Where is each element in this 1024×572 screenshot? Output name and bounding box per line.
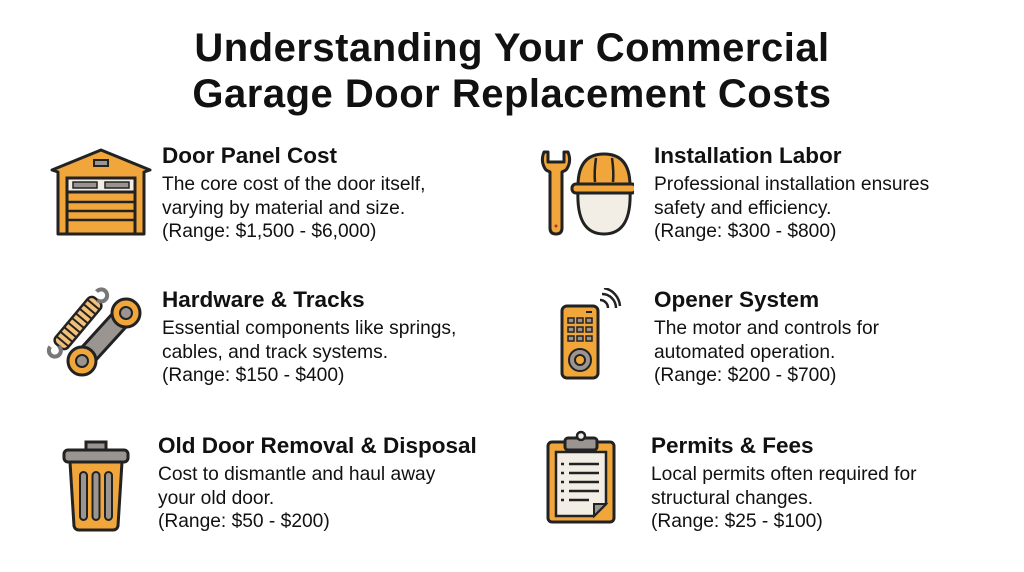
icon: wrench and worker bbox=[540, 150, 634, 236]
text: old door removal: Old Door Removal & Disposal bbox=[158, 433, 477, 458]
icon: spring and pulley bbox=[46, 287, 142, 376]
text: door panel cost: Door Panel Cost bbox=[162, 143, 337, 168]
text: installation labor bbox=[654, 143, 929, 242]
text: opener system: Opener System bbox=[654, 287, 819, 312]
text: door panel cost: The core cost of the door itself, bbox=[162, 174, 425, 195]
title: Garage Door Replacement Costs bbox=[192, 72, 832, 116]
title bbox=[192, 26, 832, 116]
text: hardware & tracks bbox=[162, 287, 456, 386]
text: installation labor: (Range: $300 - $800) bbox=[654, 221, 836, 242]
text: permits & fees: Permits & Fees bbox=[651, 433, 814, 458]
text: permits & fees: (Range: $25 - $100) bbox=[651, 511, 823, 532]
text: opener system: The motor and controls for bbox=[654, 318, 879, 339]
text: door panel cost: varying by material and size. bbox=[162, 198, 405, 218]
text: permits & fees: Local permits often required for bbox=[651, 464, 917, 485]
text: old door removal bbox=[158, 433, 477, 532]
icon: trash can bbox=[62, 440, 130, 532]
text: installation labor: safety and efficiency. bbox=[654, 198, 831, 218]
text: opener system bbox=[654, 287, 879, 386]
text: permits & fees: structural changes. bbox=[651, 488, 813, 508]
title: Understanding Your Commercial bbox=[194, 26, 830, 70]
text: old door removal: Cost to dismantle and haul away bbox=[158, 464, 435, 485]
text: permits & fees bbox=[651, 433, 917, 532]
text: installation labor: Installation Labor bbox=[654, 143, 842, 168]
text: hardware & tracks: Essential components like springs, bbox=[162, 318, 456, 339]
text: hardware & tracks: Hardware & Tracks bbox=[162, 287, 365, 312]
icon: remote bbox=[560, 288, 622, 380]
icon: garage bbox=[50, 148, 152, 236]
text: old door removal: (Range: $50 - $200) bbox=[158, 511, 330, 532]
text: opener system: (Range: $200 - $700) bbox=[654, 365, 836, 386]
text: hardware & tracks: cables, and track systems. bbox=[162, 342, 388, 362]
text: door panel cost bbox=[162, 143, 425, 242]
text: opener system: automated operation. bbox=[654, 342, 835, 362]
text: installation labor: Professional installation ensures bbox=[654, 174, 929, 195]
text: door panel cost: (Range: $1,500 - $6,000) bbox=[162, 221, 376, 242]
icon: clipboard bbox=[546, 430, 616, 524]
text: hardware & tracks: (Range: $150 - $400) bbox=[162, 365, 344, 386]
text: old door removal: your old door. bbox=[158, 488, 274, 508]
